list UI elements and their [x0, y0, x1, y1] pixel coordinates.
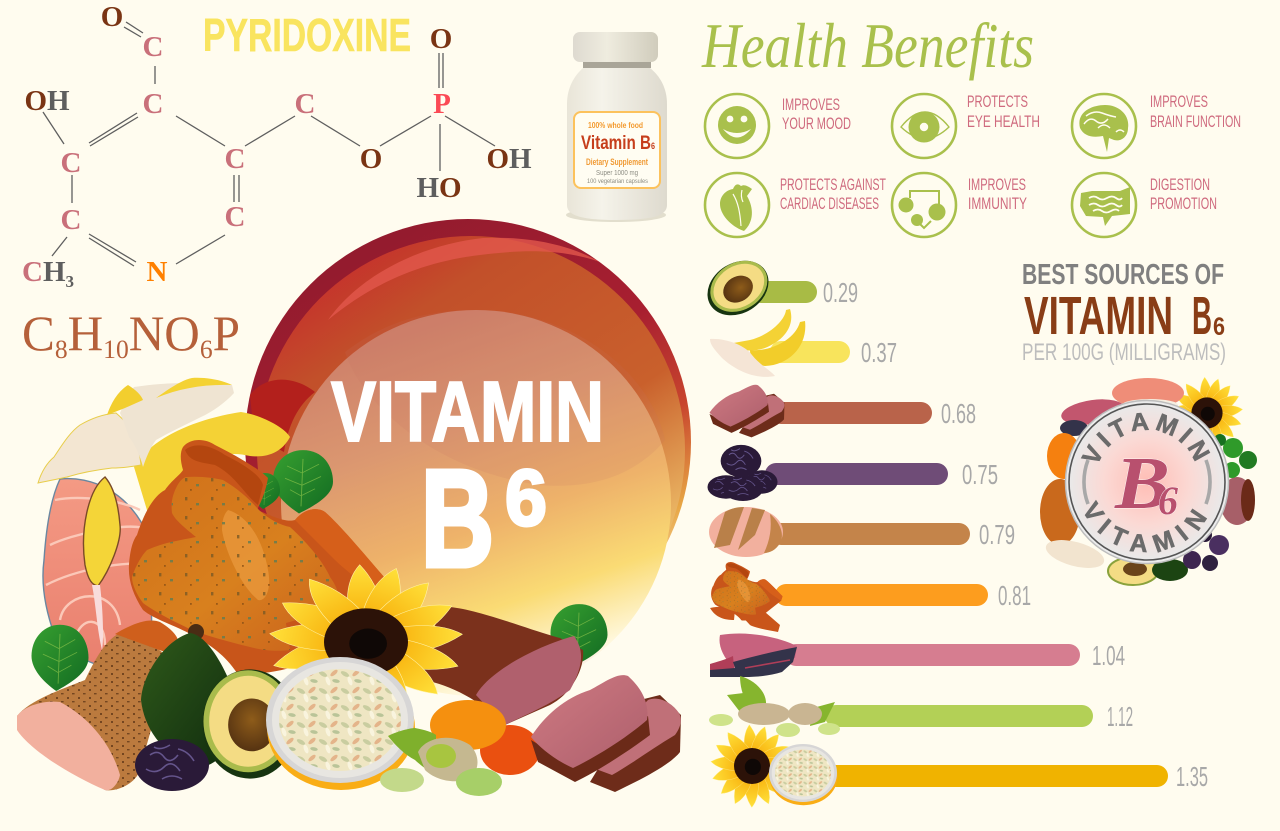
benefit: digestion promotion: PROMOTION: [1150, 194, 1217, 213]
chemical structure: pyridoxine molecule: OH: [486, 143, 532, 175]
chemical structure: pyridoxine molecule: N: [147, 256, 168, 288]
bar: beef 0.68: 0.68: [941, 398, 976, 429]
chemical structure: pyridoxine molecule: C: [143, 88, 163, 120]
chemical formula: 10: [103, 335, 129, 364]
bar: banana 0.37: 0.37: [861, 337, 897, 368]
benefit: improves your mood: [705, 94, 851, 158]
bar: banana 0.37: [710, 309, 897, 377]
heading: best sources of vitamin B6: B: [1192, 286, 1212, 346]
vitamin B6 supplement bottle: [566, 32, 667, 222]
bar: tuna 1.04: 1.04: [1092, 640, 1125, 671]
vitamin B6 supplement bottle: Vitamin B6: [581, 133, 655, 154]
benefit: protects eye health: PROTECTS: [967, 92, 1028, 111]
bar: ham 0.79: [709, 507, 1015, 557]
bar chart: vitamin B6 per 100g: 1.12: [1107, 701, 1133, 732]
chemical formula: NO: [129, 305, 200, 361]
chemical structure: pyridoxine molecule: O: [101, 1, 123, 33]
bar: beef 0.68: [710, 385, 976, 437]
icon: heart: [720, 184, 752, 231]
whole beef roast: [424, 607, 583, 725]
badge text: B6 script: 6: [1158, 478, 1178, 523]
heading: best sources of vitamin B6: 6: [1213, 313, 1225, 341]
salmon steak: [43, 479, 152, 670]
benefit: improves brain function: [1072, 92, 1241, 158]
bar: prunes 0.75: 0.75: [962, 459, 998, 490]
bar: pistachios 1.12: [709, 676, 1133, 737]
chemical structure: pyridoxine molecule: [22, 1, 532, 291]
chemical structure: pyridoxine molecule: CH: [22, 256, 66, 288]
bar: ham 0.79: 0.79: [979, 519, 1015, 550]
badge text: B6 script: B: [1114, 443, 1170, 525]
food ring: [1040, 377, 1257, 585]
prune: [135, 739, 209, 791]
chemical formula: H: [68, 305, 103, 361]
chemical structure: pyridoxine molecule: C: [61, 147, 81, 179]
icon: eye: [901, 112, 949, 142]
spinach leaf left: [31, 625, 88, 691]
chemical structure: pyridoxine molecule: 3: [66, 272, 74, 291]
vitamin B6 badge with food ring: [1040, 377, 1257, 586]
second spinach leaf: [250, 473, 280, 509]
whole avocado: [141, 624, 239, 768]
ham joint: [17, 620, 178, 790]
benefit: protects eye health: [892, 92, 1040, 158]
halved avocado: [202, 669, 298, 779]
chemical structure: pyridoxine molecule: O: [360, 143, 382, 175]
benefit: improves immunity: [892, 173, 1027, 237]
vitamin B6 supplement bottle: Super 1000 mg: [596, 170, 638, 177]
bar: avocado 0.29: 0.29: [823, 277, 858, 308]
heading: best sources of vitamin B6: VITAMIN: [1024, 286, 1173, 346]
benefit: improves immunity: IMPROVES: [968, 175, 1026, 194]
benefit: protects against cardiac diseases: [705, 173, 886, 237]
chemical structure: pyridoxine molecule: C: [295, 88, 315, 120]
chemical formula: P: [213, 305, 240, 361]
chemical structure: pyridoxine molecule: HO: [416, 172, 462, 204]
spinach leaf right: [550, 604, 608, 665]
chemical structure: pyridoxine molecule: OH: [24, 85, 70, 117]
banana bunch with peel: [38, 378, 290, 650]
chemical structure: pyridoxine molecule: O: [430, 23, 452, 55]
beef slices: [531, 675, 681, 792]
chemical formula: 6: [200, 335, 213, 364]
heading: best sources of vitamin B6: [1022, 259, 1226, 366]
badge text: vitamin arc bottom: VITAMIN: [1084, 500, 1208, 553]
chemical formula: 8: [55, 335, 68, 364]
benefit: protects eye health: EYE HEALTH: [967, 112, 1040, 131]
food pile illustration: [17, 378, 681, 796]
roast chicken: [129, 440, 384, 674]
benefit: improves brain function: IMPROVES: [1150, 92, 1208, 111]
chemical structure: pyridoxine molecule: P: [433, 88, 451, 120]
vitamin B6 supplement bottle: 100% whole food: [588, 121, 643, 130]
benefit: improves your mood: IMPROVES: [782, 95, 840, 114]
spinach leaf behind chicken: [273, 450, 333, 513]
title: pyridoxine: PYRIDOXINE: [203, 9, 411, 61]
benefit: improves immunity: IMMUNITY: [968, 194, 1027, 213]
vitamin B6 supplement bottle: Dietary Supplement: [586, 157, 648, 167]
bar: prunes 0.75: [708, 445, 998, 501]
benefit: protects against cardiac diseases: PROTECTS AGAINST: [780, 175, 886, 194]
bar chart: vitamin B6 per 100g: [697, 250, 1208, 808]
bar: chicken 0.81: [710, 562, 1031, 632]
benefit: improves your mood: YOUR MOOD: [782, 114, 851, 133]
large vitamin ball: [245, 219, 691, 696]
icon: intestines: [1080, 187, 1130, 226]
icon: immune cells: [898, 191, 946, 228]
chemical formula: C: [22, 305, 55, 361]
heading: health benefits: Health Benefits: [701, 10, 1034, 81]
bar: tuna 1.04: [710, 633, 1125, 677]
chemical structure: pyridoxine molecule: C: [225, 143, 245, 175]
benefit: digestion promotion: [1072, 173, 1217, 237]
chemical structure: pyridoxine molecule: C: [143, 31, 163, 63]
chemical structure: pyridoxine molecule: C: [61, 204, 81, 236]
icon: brain: [1079, 105, 1128, 152]
benefit: protects against cardiac diseases: CARDIAC DISEASES: [780, 194, 879, 213]
bar: seeds and sunflower 1.35: [710, 725, 1208, 808]
bar: chicken 0.81: 0.81: [998, 580, 1031, 611]
ball heading: B6: 6: [505, 453, 547, 542]
icon: smiley face: [718, 106, 756, 144]
dried apricots: [430, 700, 540, 775]
sunflower: [268, 565, 463, 720]
vitamin B6 supplement bottle: 100 vegetarian capsules: [587, 178, 649, 185]
bar: avocado 0.29: [697, 250, 858, 326]
ball heading: vitamin: VITAMIN: [331, 365, 604, 460]
benefit: digestion promotion: DIGESTION: [1150, 175, 1210, 194]
chemical structure: pyridoxine molecule: C: [225, 201, 245, 233]
bowl of seeds: [266, 657, 415, 790]
badge text: vitamin arc top: VITAMIN: [1080, 412, 1210, 462]
pistachio pile: [380, 728, 502, 796]
ball heading: B6: B: [421, 442, 494, 596]
bar: seeds and sunflower 1.35: 1.35: [1176, 761, 1208, 792]
